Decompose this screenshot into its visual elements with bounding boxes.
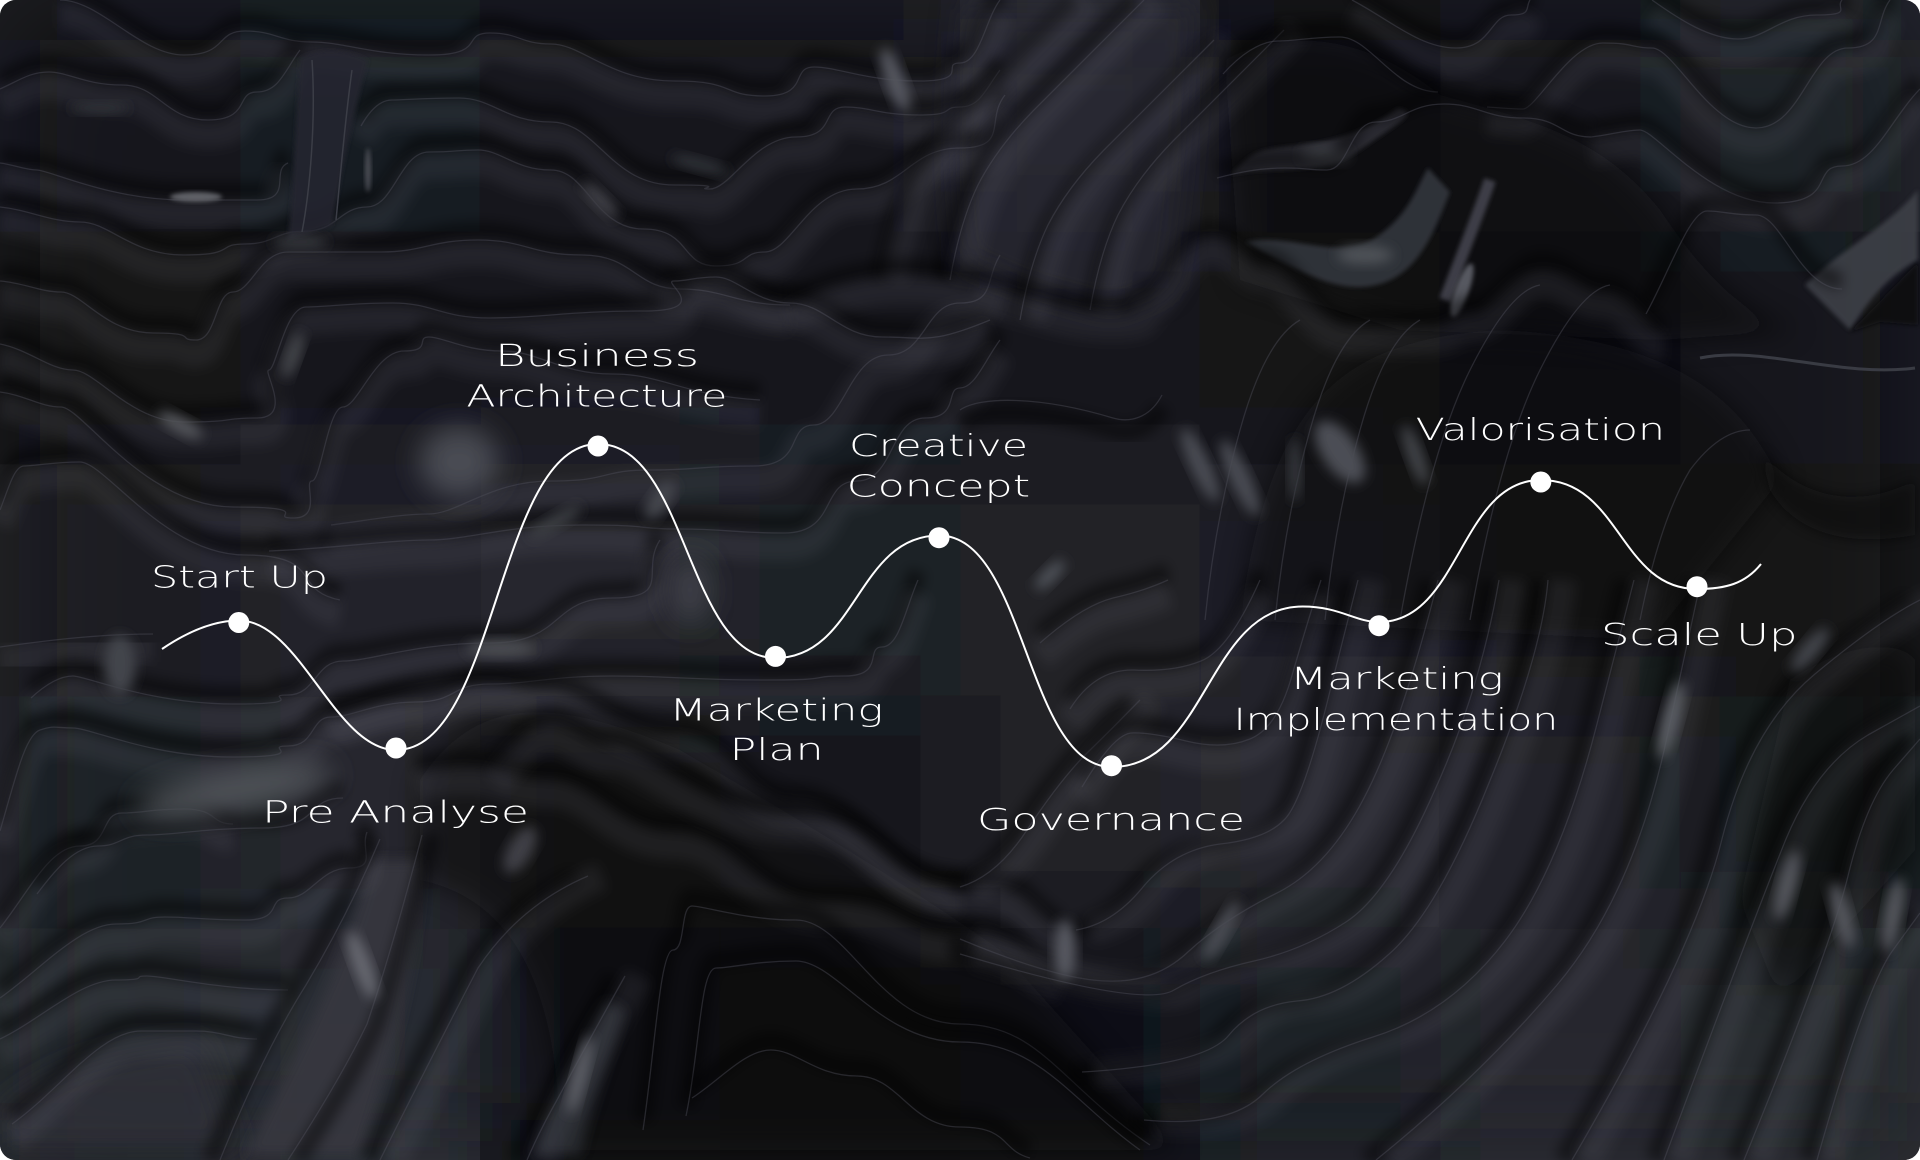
step marker: Marketing Implementation (1368, 615, 1390, 636)
step marker: Scale Up (1686, 576, 1708, 597)
label: Business Architecture: Business (495, 339, 699, 374)
step marker: Marketing Plan (765, 646, 786, 667)
label: Creative Concept: Creative (849, 429, 1028, 464)
label: Creative Concept: Concept (847, 470, 1030, 504)
wave edges, lower left and centre (0, 531, 1150, 1160)
label: Marketing Plan (669, 694, 883, 768)
label: Pre Analyse: Pre Analyse (262, 796, 529, 830)
label: Marketing Plan: Marketing (669, 694, 883, 729)
label: Start Up: Start Up (151, 560, 328, 596)
step marker: Start Up (228, 612, 249, 633)
wave edges, upper right (790, 0, 1920, 620)
label: Business Architecture: Architecture (466, 379, 727, 414)
process curve (162, 444, 1761, 767)
step marker: Valorisation (1530, 472, 1551, 492)
step marker: Business Architecture (588, 436, 608, 456)
stripe edges, lower right (950, 571, 1920, 1160)
step marker: Pre Analyse (386, 738, 406, 758)
step marker: Governance (1101, 755, 1122, 776)
wave edges, top left (0, 0, 1005, 614)
label: Governance: Governance (977, 803, 1245, 838)
step marker: Creative Concept (928, 527, 950, 548)
label: Marketing Plan: Plan (730, 733, 824, 768)
folded ribbon band, upper right (1230, 108, 1915, 539)
label: Marketing Implementation: Implementation (1234, 703, 1558, 738)
label: Valorisation: Valorisation (1416, 413, 1665, 448)
label: Scale Up: Scale Up (1601, 618, 1798, 653)
label: Creative Concept (847, 429, 1030, 504)
label: Marketing Implementation (1234, 662, 1558, 738)
label: Business Architecture (466, 339, 727, 414)
label: Marketing Implementation: Marketing (1290, 662, 1504, 697)
pillar strip near the top left (288, 51, 368, 240)
